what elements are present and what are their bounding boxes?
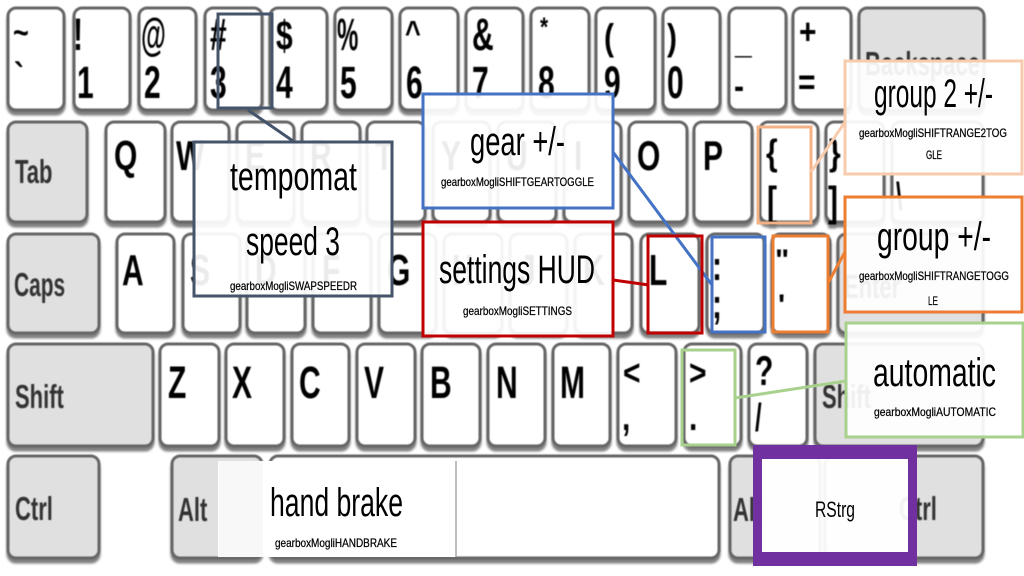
key: 8: 8 bbox=[538, 58, 555, 109]
key: F bbox=[313, 234, 371, 333]
key: 0 bbox=[663, 8, 720, 110]
box: tempomat bbox=[194, 142, 392, 296]
key: equals: + bbox=[799, 12, 817, 53]
key: minus: - bbox=[734, 66, 744, 107]
key: E bbox=[237, 122, 294, 222]
key: left Ctrl: Ctrl bbox=[15, 491, 53, 527]
key: R bbox=[302, 122, 360, 222]
key: J bbox=[510, 234, 567, 333]
key: semicolon: ; bbox=[712, 280, 722, 327]
key: right Ctrl bbox=[825, 456, 983, 558]
key: Z bbox=[160, 344, 219, 446]
key: left bracket bbox=[760, 122, 818, 225]
key: 8: * bbox=[540, 13, 549, 43]
key: right Alt: Alt bbox=[733, 492, 762, 528]
key: comma: < bbox=[623, 353, 641, 394]
key: 9 bbox=[596, 8, 655, 110]
key: 8 bbox=[531, 8, 589, 110]
code wrap: GLE: GLE bbox=[926, 148, 942, 162]
key: right bracket: ] bbox=[828, 178, 838, 225]
key: N: N bbox=[496, 358, 518, 409]
key: Backspace: Backspace bbox=[865, 46, 980, 82]
key: Caps bbox=[8, 234, 99, 333]
key: Z: Z bbox=[168, 358, 186, 409]
key: V: V bbox=[364, 358, 384, 409]
key: I: I bbox=[574, 132, 582, 179]
box: group bbox=[845, 197, 1022, 312]
key: right bracket: } bbox=[829, 133, 841, 174]
key: period: > bbox=[689, 353, 707, 394]
key: K: K bbox=[583, 245, 605, 294]
code: SWAPSPEEDR: gearboxMogliSWAPSPEEDR bbox=[230, 279, 357, 293]
key: H: H bbox=[452, 245, 474, 294]
key: T bbox=[367, 122, 425, 222]
key: X bbox=[226, 344, 284, 446]
label: hand brake: hand brake bbox=[270, 481, 403, 525]
key: left Ctrl bbox=[8, 456, 99, 558]
key: O: O bbox=[637, 132, 660, 179]
callout: hand brake bbox=[218, 461, 456, 557]
key: 1 bbox=[73, 8, 130, 110]
key: tilde bbox=[8, 8, 64, 110]
key: W bbox=[172, 122, 229, 222]
key: minus: _ bbox=[734, 21, 752, 62]
key: J: J bbox=[519, 245, 536, 294]
key: left Alt: Alt bbox=[178, 492, 207, 528]
key: tilde: ` bbox=[14, 56, 24, 97]
key: slash bbox=[749, 344, 807, 446]
key: left Shift: Shift bbox=[15, 379, 64, 415]
key: N bbox=[488, 344, 545, 446]
callout: RStrg bbox=[753, 445, 917, 566]
QWERTY row bbox=[8, 122, 983, 225]
callout: automatic bbox=[682, 323, 1023, 445]
label: speed 3: speed 3 bbox=[246, 220, 340, 264]
key: P bbox=[694, 122, 752, 222]
key highlight: left bracket bbox=[758, 127, 811, 223]
key: quote bbox=[772, 234, 830, 333]
key: X: X bbox=[232, 358, 252, 409]
key highlight: quote bbox=[773, 236, 828, 332]
key: 9: ( bbox=[604, 17, 615, 59]
key: P: P bbox=[703, 132, 723, 179]
label: gear +/-: gear +/- bbox=[470, 120, 565, 164]
key: left Shift bbox=[8, 344, 153, 446]
home row bbox=[8, 234, 983, 333]
key: 2: 2 bbox=[144, 58, 161, 109]
key: D: D bbox=[255, 245, 277, 294]
key: comma: , bbox=[622, 396, 630, 439]
key: tilde: ~ bbox=[13, 16, 29, 52]
key: 1: 1 bbox=[77, 58, 94, 109]
key: 3 bbox=[205, 8, 262, 110]
connector: tempomat bbox=[248, 110, 293, 141]
key: Caps: Caps bbox=[14, 266, 65, 303]
callout: settings HUD bbox=[423, 222, 702, 336]
key highlight: 3 bbox=[218, 14, 272, 108]
key highlight: semicolon bbox=[712, 237, 765, 332]
key: Enter: Enter bbox=[844, 269, 900, 305]
key: H bbox=[444, 234, 502, 333]
key: L bbox=[641, 234, 699, 333]
key: M: M bbox=[560, 358, 585, 409]
connector: group bbox=[828, 252, 845, 283]
key: E: E bbox=[245, 132, 265, 179]
key: R: R bbox=[310, 132, 332, 179]
key: 7: & bbox=[472, 10, 494, 61]
key: 4: $ bbox=[276, 12, 293, 59]
code: AUTOMATIC: gearboxMogliAUTOMATIC bbox=[874, 405, 996, 419]
box tint: left bbox=[219, 461, 263, 557]
key: B bbox=[422, 344, 480, 446]
callout: group +/- bbox=[773, 197, 1022, 332]
key highlight: period bbox=[682, 350, 735, 445]
box: gear bbox=[423, 94, 613, 208]
key: I bbox=[564, 122, 621, 222]
key: comma bbox=[618, 344, 676, 446]
key: 3: # bbox=[210, 10, 227, 61]
code: SHIFTGEARTOGGLE: gearboxMogliSHIFTGEARTOGGLE bbox=[441, 175, 594, 189]
key: slash: / bbox=[755, 396, 762, 439]
callout: group 2 +/- bbox=[758, 61, 1022, 223]
key: C bbox=[292, 344, 349, 446]
key: 3: 3 bbox=[210, 58, 227, 109]
key: V bbox=[357, 344, 415, 446]
key: 6 bbox=[400, 8, 458, 110]
label: settings HUD: settings HUD bbox=[439, 248, 595, 292]
key: right Shift: Shift bbox=[822, 379, 871, 415]
key: 7: 7 bbox=[472, 58, 489, 109]
key: Backspace bbox=[859, 8, 984, 110]
code: SETTINGS: gearboxMogliSETTINGS bbox=[463, 304, 572, 318]
key highlight: L bbox=[648, 236, 702, 333]
key: backslash bbox=[892, 122, 983, 222]
key: O bbox=[629, 122, 687, 222]
key: period: . bbox=[689, 396, 697, 439]
key: G: G bbox=[387, 245, 410, 294]
key: B: B bbox=[430, 358, 452, 409]
key: 6: ^ bbox=[405, 16, 421, 52]
callout: tempomat speed 3 bbox=[194, 14, 392, 296]
box: RStrg bbox=[753, 445, 917, 566]
key: right Shift bbox=[815, 344, 983, 446]
key: semicolon bbox=[707, 234, 764, 333]
key: S: S bbox=[190, 245, 210, 294]
key: 4: 4 bbox=[276, 58, 293, 109]
key: Q bbox=[106, 122, 165, 222]
key: Y bbox=[433, 122, 490, 222]
connector: automatic bbox=[735, 381, 846, 398]
key: G bbox=[379, 234, 436, 333]
key: D bbox=[247, 234, 305, 333]
key: Enter bbox=[838, 234, 983, 333]
key: 0: 0 bbox=[667, 58, 684, 109]
key: equals bbox=[793, 8, 851, 110]
connector: group 2 bbox=[811, 122, 845, 172]
label: tempomat: tempomat bbox=[230, 155, 357, 199]
key: S bbox=[183, 234, 240, 333]
key: W: W bbox=[176, 132, 205, 179]
key: right bracket bbox=[826, 122, 884, 225]
callout: gear +/- bbox=[423, 94, 765, 332]
box: settings bbox=[423, 222, 613, 336]
key: quote: ' bbox=[778, 289, 785, 322]
key: Tab: Tab bbox=[15, 154, 52, 190]
key: 5: % bbox=[337, 9, 358, 60]
key: 5: 5 bbox=[340, 58, 357, 109]
lower row bbox=[8, 344, 983, 446]
label: RStrg: RStrg bbox=[815, 497, 855, 522]
key: 2 bbox=[139, 8, 196, 110]
key: left bracket: [ bbox=[767, 178, 777, 225]
key: 5 bbox=[335, 8, 392, 110]
key: F: F bbox=[322, 245, 340, 294]
key: L: L bbox=[649, 245, 667, 294]
key: semicolon: : bbox=[712, 242, 722, 289]
key: right Ctrl: Ctrl bbox=[899, 491, 937, 527]
key: Tab bbox=[8, 122, 87, 222]
key: U bbox=[498, 122, 556, 222]
key: 0: ) bbox=[667, 17, 677, 59]
key: A bbox=[117, 234, 174, 333]
connector: settings bbox=[613, 280, 649, 285]
key: 4 bbox=[270, 8, 327, 110]
key: 1: ! bbox=[73, 10, 83, 61]
code wrap: LE: LE bbox=[928, 294, 938, 308]
box fill bbox=[762, 459, 908, 552]
box: hand brake bbox=[218, 461, 456, 557]
bottom row bbox=[8, 456, 983, 558]
key: minus bbox=[729, 8, 786, 110]
code: HANDBRAKE: gearboxMogliHANDBRAKE bbox=[275, 536, 397, 550]
key: left bracket: { bbox=[766, 133, 778, 174]
key: C: C bbox=[299, 358, 321, 409]
key: backslash: \ bbox=[896, 175, 903, 218]
key: A: A bbox=[122, 245, 144, 294]
key: right Alt bbox=[730, 456, 820, 558]
key: K bbox=[575, 234, 632, 333]
key: T: T bbox=[375, 132, 393, 179]
key: 2: @ bbox=[141, 9, 166, 60]
box edge bbox=[455, 461, 457, 557]
key: quote: " bbox=[775, 244, 789, 277]
key: Q: Q bbox=[114, 132, 137, 179]
key: left Alt bbox=[172, 456, 262, 558]
key: 9: 9 bbox=[604, 58, 621, 109]
key: 6: 6 bbox=[406, 58, 423, 109]
connector: gear bbox=[613, 152, 712, 285]
key: slash: ? bbox=[755, 347, 773, 394]
key: space bar bbox=[270, 456, 719, 558]
key: period bbox=[684, 344, 741, 446]
key: M bbox=[553, 344, 610, 446]
key: equals: = bbox=[798, 62, 816, 103]
key: Y: Y bbox=[441, 132, 461, 179]
number row bbox=[8, 8, 984, 110]
key: 7 bbox=[466, 8, 523, 110]
box: automatic bbox=[846, 323, 1023, 437]
key: U: U bbox=[506, 132, 528, 179]
box: group 2 bbox=[845, 61, 1022, 174]
